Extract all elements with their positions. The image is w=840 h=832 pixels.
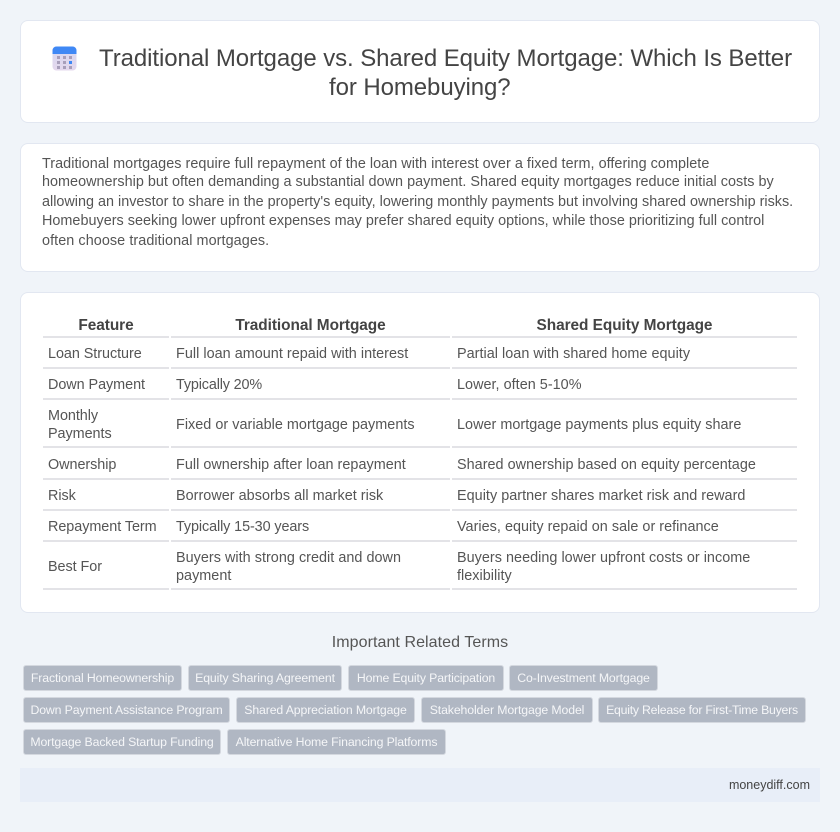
- related term tags: Co-Investment Mortgage: [517, 671, 650, 685]
- related term tags: Equity Release for First-Time Buyers: [606, 703, 798, 717]
- text block: summary: [42, 156, 793, 249]
- row: monthly payments: Lower mortgage payments plus equity share: [457, 417, 741, 433]
- related term tags: Down Payment Assistance Program: [30, 703, 223, 717]
- related term tags: Home Equity Participation: [357, 671, 495, 685]
- related term tags: Alternative Home Financing Platforms: [236, 735, 437, 749]
- table header: Traditional Mortgage: [235, 317, 386, 334]
- heading: important related terms: Important Related Terms: [332, 634, 508, 651]
- footer source text: moneydiff.com: [729, 778, 810, 792]
- row: best for: Buyers needing lower upfront costs or income: [457, 550, 750, 566]
- table header: [78, 317, 712, 334]
- text block: summary: allowing an investor to share in the property's equity, lowering monthly payments but involving shared ownership risks.: [42, 194, 793, 210]
- row: loan structure: Full loan amount repaid with interest: [176, 346, 408, 362]
- row: monthly payments: Monthly: [48, 408, 98, 424]
- row: monthly payments: Payments: [48, 426, 112, 442]
- row: repayment term: Varies, equity repaid on sale or refinance: [457, 519, 719, 535]
- footer: [20, 768, 820, 802]
- icon: calendar: [52, 46, 76, 70]
- table header: Feature: [78, 317, 134, 334]
- row: loan structure: Partial loan with shared home equity: [457, 346, 690, 362]
- row: monthly payments: [48, 408, 741, 442]
- row: risk: Borrower absorbs all market risk: [176, 488, 383, 504]
- row: repayment term: Repayment Term: [48, 519, 157, 535]
- row: risk: [48, 488, 745, 504]
- row: risk: Equity partner shares market risk and reward: [457, 488, 745, 504]
- text block: summary: often choose traditional mortgages.: [42, 233, 269, 249]
- row: best for: Best For: [48, 559, 102, 575]
- row: best for: flexibility: [457, 568, 512, 584]
- panel: comparison table card: [20, 292, 820, 613]
- related term tags: Mortgage Backed Startup Funding: [30, 735, 214, 749]
- table header: Shared Equity Mortgage: [537, 317, 712, 334]
- row: down payment: Lower, often 5-10%: [457, 377, 582, 393]
- row: down payment: Typically 20%: [176, 377, 262, 393]
- row: best for: Buyers with strong credit and down: [176, 550, 401, 566]
- row: loan structure: Loan Structure: [48, 346, 142, 362]
- title: Traditional Mortgage vs. Shared Equity Mortgage: Which Is Better: [99, 45, 792, 72]
- row: repayment term: [48, 519, 719, 535]
- related term tags: Shared Appreciation Mortgage: [244, 703, 407, 717]
- row: repayment term: Typically 15-30 years: [176, 519, 309, 535]
- related term tags: Equity Sharing Agreement: [195, 671, 335, 685]
- text block: summary: homeownership but often demanding a substantial down payment. Shared equity mortgages reduce initial costs by: [42, 174, 774, 190]
- panel: summary card: [20, 143, 820, 272]
- row: down payment: Down Payment: [48, 377, 145, 393]
- panel: title card: [20, 20, 820, 123]
- related term tags: Stakeholder Mortgage Model: [430, 703, 584, 717]
- row: ownership: [48, 457, 756, 473]
- title: [99, 45, 792, 101]
- row: down payment: [48, 377, 582, 393]
- row: ownership: Shared ownership based on equity percentage: [457, 457, 756, 473]
- text block: summary: Traditional mortgages require full repayment of the loan with interest over a fixed term, offering complete: [42, 156, 709, 172]
- related term tags: Fractional Homeownership: [31, 671, 174, 685]
- comparison table: [43, 317, 797, 590]
- row: monthly payments: Fixed or variable mortgage payments: [176, 417, 415, 433]
- text block: summary: Homebuyers seeking lower upfront expenses may prefer shared equity options, while those prioritizing full control: [42, 213, 764, 229]
- row: best for: payment: [176, 568, 231, 584]
- title: for Homebuying?: [329, 74, 511, 101]
- row: loan structure: [48, 346, 690, 362]
- row: ownership: Ownership: [48, 457, 116, 473]
- row: risk: Risk: [48, 488, 76, 504]
- related term tags: [23, 665, 806, 755]
- row: best for: [48, 550, 750, 584]
- row: ownership: Full ownership after loan repayment: [176, 457, 406, 473]
